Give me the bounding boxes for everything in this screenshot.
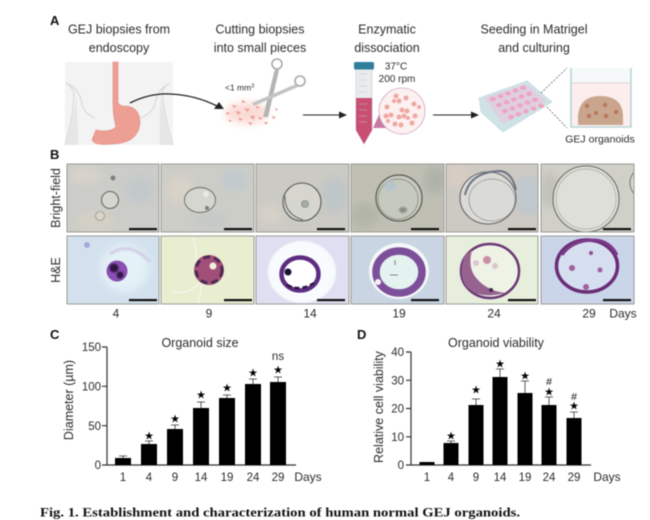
x tick labels: 4 bbox=[448, 472, 455, 484]
y tick labels: 30 bbox=[391, 376, 404, 388]
bars bbox=[420, 377, 582, 465]
micrograph: bright-field day 19 bbox=[351, 164, 445, 232]
step title: cutting: Cutting biopsies bbox=[216, 22, 304, 36]
bars bbox=[115, 382, 286, 465]
panel letter A: A bbox=[50, 13, 60, 28]
chart title: Organoid viability bbox=[448, 336, 545, 350]
significance stars: ★ bbox=[544, 386, 554, 398]
figure caption: Fig. 1. Establishment and characterization of human normal GEJ organoids. bbox=[40, 506, 520, 520]
arrow: cutting to dissociation bbox=[303, 112, 347, 118]
label: incubation conditions: 200 rpm bbox=[379, 74, 415, 85]
micrograph: H&E day 29 bbox=[541, 236, 634, 304]
icon: culture plate bbox=[479, 81, 552, 132]
arrow: biopsy to cutting bbox=[130, 94, 224, 109]
x tick labels: 4 bbox=[146, 472, 153, 484]
row label: H&E: H&E bbox=[49, 257, 63, 283]
y tick labels: 0 bbox=[95, 460, 101, 472]
x tick labels bbox=[424, 470, 621, 484]
significance stars: ★ bbox=[495, 358, 505, 370]
panel A: organoid workflow bbox=[50, 13, 635, 146]
hash marks: # bbox=[546, 376, 552, 388]
ns label: ns bbox=[272, 351, 284, 363]
micrograph: bright-field day 24 bbox=[444, 163, 542, 232]
x tick labels bbox=[120, 470, 322, 484]
step title: dissociation: dissociation bbox=[354, 41, 420, 55]
label: incubation conditions: 37°C bbox=[385, 62, 407, 72]
axes bbox=[102, 347, 296, 465]
step title: GEJ biopsies: endoscopy bbox=[89, 41, 150, 55]
hash marks: # bbox=[571, 391, 577, 403]
x tick labels: 24 bbox=[543, 472, 556, 484]
step title: cutting: into small pieces bbox=[214, 41, 306, 55]
x tick labels: Days bbox=[294, 470, 322, 484]
day labels: 29 bbox=[582, 306, 596, 320]
label: tissue size: 3 bbox=[251, 84, 254, 90]
y tick labels bbox=[391, 347, 404, 472]
micrograph: bright-field day 14 bbox=[256, 164, 349, 232]
step title: dissociation: Enzymatic bbox=[358, 22, 416, 36]
x tick labels: 19 bbox=[519, 472, 531, 484]
y-axis title: Relative cell viability bbox=[372, 350, 386, 463]
y-axis title: Diameter (µm) bbox=[62, 360, 76, 440]
day labels: 4 bbox=[113, 306, 120, 320]
y tick labels: 50 bbox=[88, 421, 101, 433]
significance stars: ★ bbox=[196, 388, 206, 402]
step title: seeding: Seeding in Matrigel bbox=[480, 22, 588, 36]
y tick labels: 40 bbox=[391, 347, 404, 359]
x tick labels: 9 bbox=[473, 472, 479, 484]
y tick labels: 0 bbox=[398, 460, 404, 472]
axes bbox=[406, 352, 591, 465]
icon: scissors and tissue pieces bbox=[225, 59, 305, 125]
error bars bbox=[119, 377, 282, 458]
micrograph: H&E day 14 bbox=[256, 236, 349, 304]
error bars bbox=[447, 369, 578, 443]
x tick labels: 19 bbox=[221, 472, 233, 484]
arrow: dissociation to seeding bbox=[433, 112, 479, 118]
significance stars: ★ bbox=[170, 412, 180, 426]
micrograph: bright-field day 29 bbox=[541, 164, 634, 232]
panel letter C: C bbox=[50, 327, 60, 342]
chart title: Organoid size bbox=[161, 336, 239, 350]
significance stars: ★ bbox=[569, 400, 579, 412]
dashed zoom lines bbox=[541, 68, 567, 128]
x tick labels: 14 bbox=[195, 472, 208, 484]
day labels bbox=[113, 306, 637, 320]
micrograph: H&E day 19 bbox=[351, 236, 444, 304]
step title: seeding: and culturing bbox=[498, 41, 570, 55]
significance stars bbox=[144, 364, 283, 442]
panel C: organoid size chart bbox=[50, 327, 322, 484]
x tick labels: 14 bbox=[494, 472, 507, 484]
significance stars bbox=[446, 358, 579, 442]
micrograph: bright-field day 9 bbox=[161, 164, 254, 232]
panel B: micrographs bbox=[49, 147, 650, 320]
panel letter D: D bbox=[357, 327, 366, 342]
micrograph: H&E day 9 bbox=[161, 236, 254, 304]
y tick labels: 10 bbox=[391, 432, 404, 444]
micrograph frames bbox=[67, 164, 634, 304]
x tick labels: Days bbox=[593, 470, 621, 484]
significance stars: ★ bbox=[273, 364, 283, 376]
significance stars: ★ bbox=[222, 382, 232, 394]
significance stars: ★ bbox=[520, 370, 530, 382]
micrograph: H&E day 24 bbox=[446, 236, 538, 304]
x tick labels: 1 bbox=[424, 472, 430, 484]
label: GEJ organoids: GEJ organoids bbox=[565, 134, 635, 146]
panel letter B: B bbox=[50, 147, 59, 162]
step title: GEJ biopsies: GEJ biopsies from bbox=[68, 22, 170, 36]
icon: torso with stomach bbox=[65, 62, 173, 145]
x tick labels: 29 bbox=[568, 472, 580, 484]
day labels: 24 bbox=[487, 306, 501, 320]
row label: Bright-field: Bright-field bbox=[49, 168, 63, 228]
day labels: Days bbox=[609, 306, 637, 320]
icon: well with organoids in Matrigel bbox=[571, 68, 631, 127]
micrograph: bright-field day 4 bbox=[67, 164, 159, 232]
x tick labels: 29 bbox=[272, 472, 284, 484]
label: tissue size: <1 mm bbox=[225, 82, 251, 92]
x tick labels: 24 bbox=[247, 472, 260, 484]
day labels: 9 bbox=[206, 306, 213, 320]
x tick labels: 9 bbox=[172, 472, 178, 484]
x tick labels: 1 bbox=[120, 472, 126, 484]
panel D: organoid viability chart bbox=[357, 327, 621, 484]
significance stars: ★ bbox=[471, 384, 481, 396]
day labels: 14 bbox=[303, 306, 317, 320]
hash marks bbox=[546, 376, 577, 403]
y tick labels: 150 bbox=[82, 342, 101, 354]
y tick labels bbox=[82, 342, 101, 472]
icon: magnified cell suspension bbox=[373, 88, 425, 134]
significance stars: ★ bbox=[144, 430, 154, 442]
day labels: 19 bbox=[392, 306, 406, 320]
significance stars: ★ bbox=[248, 366, 258, 380]
micrograph: H&E day 4 bbox=[67, 236, 159, 304]
significance stars: ★ bbox=[446, 430, 456, 442]
y tick labels: 100 bbox=[82, 382, 101, 394]
icon: centrifuge tube bbox=[354, 62, 374, 144]
y tick labels: 20 bbox=[391, 404, 404, 416]
